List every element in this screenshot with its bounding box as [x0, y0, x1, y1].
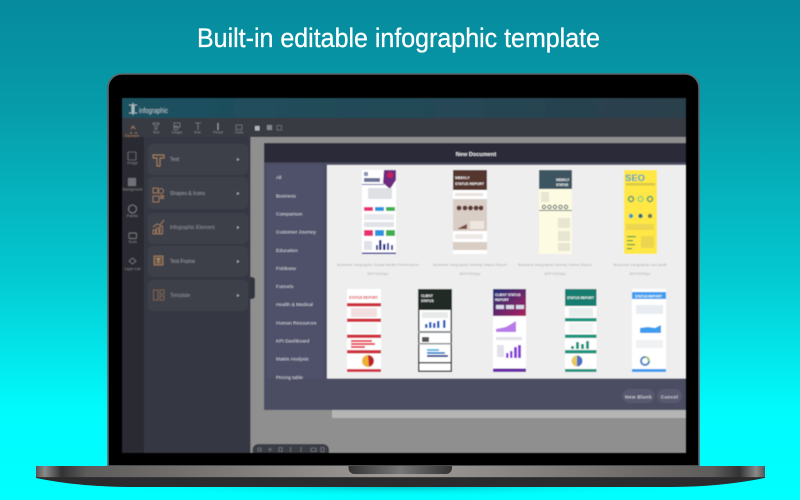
app screen — [122, 98, 686, 453]
canvas area — [122, 98, 686, 453]
caption 3: Business Infographic-Weekly Status Report — [518, 262, 593, 267]
category list: Matrix Analysis — [276, 356, 309, 362]
caption 4: Business Infographic-seo audit — [614, 262, 667, 267]
laptop base — [36, 466, 765, 487]
tool: pencil — [213, 123, 223, 134]
new document dialog — [264, 143, 686, 410]
template: client status report dark: CLIENT — [421, 294, 433, 298]
rail item: tools — [128, 233, 137, 244]
template: weekly status report brown: WEEKLY — [455, 176, 470, 180]
app name: infographic — [139, 106, 168, 115]
template: weekly status report brown: STATUS REPORT — [455, 182, 485, 186]
template: weekly status report cream: WEEKLY — [556, 178, 570, 182]
category list: All — [276, 175, 281, 181]
card: text: Text — [170, 157, 180, 163]
caption 1 — [337, 262, 420, 276]
tool: text — [153, 123, 159, 134]
page behind dialog — [332, 409, 686, 418]
button: new blank: New Blank — [625, 394, 652, 400]
template: status report teal: STATUS REPORT — [567, 296, 595, 300]
category list: KPI Dashboard — [276, 338, 309, 344]
caption 4: 800*2000px — [629, 271, 651, 276]
caption 2: 800*2000px — [459, 271, 481, 276]
left icon rail — [122, 137, 144, 453]
laptop notch — [348, 466, 452, 474]
rail item: background — [123, 178, 142, 192]
top toolbar — [122, 118, 686, 138]
caption 1: Business Infographic-Social Media Performance — [337, 262, 420, 267]
rail item: layer list: Layer List — [124, 267, 140, 271]
file icons — [255, 125, 282, 130]
card: shapes and icons — [148, 177, 248, 209]
dialog title bar: New Document — [456, 152, 496, 158]
category list — [267, 165, 324, 381]
card: text — [148, 144, 248, 175]
template: client status report dark: STATUS — [421, 299, 434, 303]
card: infographic element — [148, 213, 248, 244]
button: cancel: Cancel — [661, 394, 678, 400]
laptop — [36, 74, 765, 497]
category list: Comparison — [276, 212, 303, 218]
template: seo audit yellow: SEO — [625, 173, 645, 184]
card: shapes and icons: Shapes & Icons — [170, 191, 206, 197]
tool: pen — [194, 123, 201, 134]
tool: element — [125, 126, 140, 138]
title: Built-in editable infographic template — [197, 23, 600, 53]
panel collapse handle — [250, 277, 255, 299]
rail item: image — [127, 152, 138, 165]
tool: pen: Pen — [194, 130, 201, 134]
card: template — [148, 280, 248, 311]
tool: shape: Shape — [172, 130, 182, 134]
bottom toolbar — [252, 444, 329, 453]
icon: app logo — [129, 103, 137, 115]
template: status report blue — [632, 289, 666, 372]
caption 2 — [433, 262, 508, 276]
category list: Business — [276, 194, 296, 200]
caption 3 — [518, 262, 593, 276]
caption 4 — [614, 262, 667, 276]
element panel — [144, 137, 255, 453]
category list: Health & Medical — [276, 302, 313, 308]
template: client status report purple — [493, 289, 526, 372]
template: status report red: STATUS REPORT — [349, 295, 378, 300]
template: status report blue: STATUS REPORT — [635, 294, 662, 298]
caption 2: Business Infographic-Weekly Status Report — [433, 262, 508, 267]
template: social media performance — [362, 170, 396, 254]
template: client status report dark — [418, 289, 452, 372]
category list: Funnels — [276, 284, 294, 290]
caption 3: 800*2000px — [544, 271, 566, 276]
tool: pencil: Pencil — [213, 130, 223, 134]
card: infographic element: Infographic Element — [170, 225, 215, 231]
rail item: image: Image — [127, 161, 138, 165]
rail item: palette: Palette — [127, 214, 138, 218]
template: weekly status report brown — [453, 170, 487, 254]
tool: text: Text — [153, 130, 159, 134]
laptop bezel — [108, 74, 699, 466]
tool: element: Element — [125, 134, 140, 138]
category list: Customer Journey — [276, 230, 317, 236]
template: status report teal — [565, 289, 596, 372]
template: weekly status report cream: STATUS — [556, 183, 568, 187]
tool: tools — [235, 125, 243, 134]
caption 1: 800*2000px — [367, 271, 389, 276]
card: text frame: T — [157, 259, 161, 265]
rail item: layer list — [124, 258, 140, 271]
category list: Education — [276, 248, 298, 254]
template: seo audit yellow — [624, 170, 657, 254]
card: template: Template — [170, 293, 191, 299]
button: cancel — [657, 389, 682, 403]
laptop shadow — [100, 475, 700, 497]
template: status report red — [347, 289, 381, 372]
app header — [122, 98, 686, 118]
template gallery — [327, 165, 686, 378]
rail item: tools: Tools — [128, 240, 137, 244]
tool: tools: Tools — [235, 130, 243, 134]
category list: Pricing table — [276, 375, 303, 381]
template: weekly status report cream — [539, 170, 572, 254]
category list: Human Resources — [276, 320, 317, 326]
dialog title bar — [264, 143, 686, 162]
tool: shape — [172, 123, 182, 134]
button: new blank — [622, 389, 654, 403]
category list: Fishbone — [276, 266, 296, 272]
card: text frame — [148, 246, 248, 277]
template: client status report purple: REPORT — [495, 298, 509, 302]
rail item: background: Background — [123, 188, 142, 192]
template: client status report purple: CLIENT STATUS — [495, 293, 521, 297]
card: text frame: Text Frame — [170, 259, 195, 265]
rail item: palette — [127, 205, 138, 218]
